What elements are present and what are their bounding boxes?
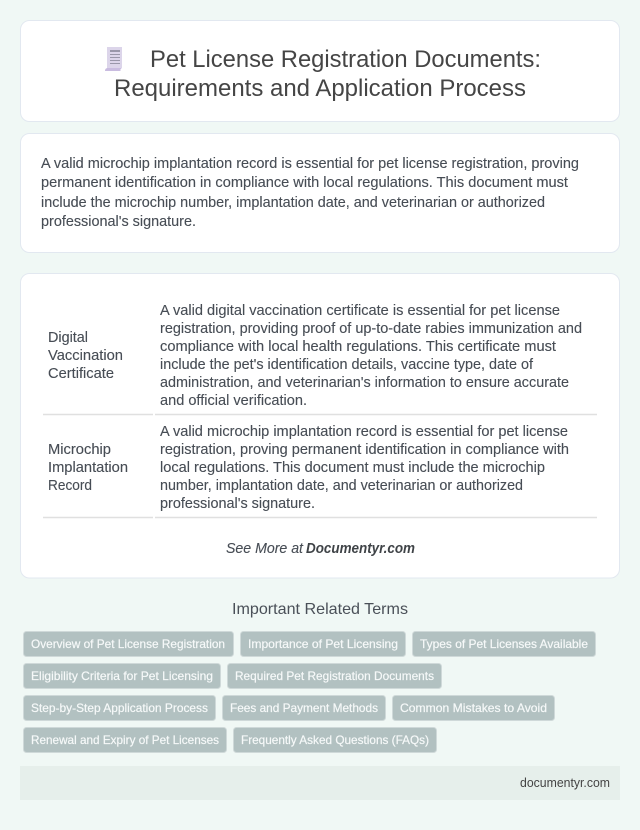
tag	[234, 728, 436, 752]
tag: Types of Pet Licenses Available	[420, 637, 588, 651]
row description: A valid digital vaccination certificate is essential for pet license	[160, 303, 560, 319]
row description: include the pet's identification details, vaccine type, date of	[160, 357, 534, 373]
see more link	[226, 541, 415, 557]
row label: Microchip	[48, 442, 111, 458]
tag	[240, 632, 406, 656]
row label: Record	[48, 478, 92, 494]
row label	[48, 442, 128, 494]
row description: and official verification.	[160, 393, 307, 409]
title: Requirements and Application Process	[114, 75, 526, 102]
tag: Overview of Pet License Registration	[31, 637, 225, 651]
row description: compliance with local health regulations. This certificate must	[160, 339, 556, 355]
tag: Required Pet Registration Documents	[235, 669, 434, 683]
table row: digital vaccination certificate	[48, 303, 582, 409]
intro text: permanent identification in compliance with local regulations. This document must	[41, 175, 568, 191]
tag	[412, 632, 596, 656]
row description: A valid microchip implantation record is essential for pet license	[160, 424, 568, 440]
row description: number, implantation date, and veterinarian or authorized	[160, 478, 523, 494]
tag	[24, 632, 234, 656]
footer	[20, 766, 620, 800]
tag: Renewal and Expiry of Pet Licenses	[31, 733, 219, 747]
row description: professional's signature.	[160, 496, 315, 512]
tag: Importance of Pet Licensing	[248, 637, 398, 651]
table row: microchip implantation record	[48, 424, 569, 512]
row label: Certificate	[48, 366, 114, 382]
row description: registration, providing proof of up-to-date rabies immunization and	[160, 321, 582, 337]
row description: local regulations. This document must include the microchip	[160, 460, 545, 476]
intro text: professional's signature.	[41, 214, 196, 230]
tag	[24, 664, 220, 688]
see more link: See More at	[226, 541, 304, 557]
tag: Step-by-Step Application Process	[31, 701, 208, 715]
tag: Frequently Asked Questions (FAQs)	[241, 733, 429, 747]
row label: Vaccination	[48, 348, 123, 364]
tag	[24, 696, 216, 720]
panel: document table	[20, 274, 620, 578]
panel: title card	[20, 20, 620, 122]
intro text: include the microchip number, implantation date, and veterinarian or authorized	[41, 195, 545, 211]
title: Pet License Registration Documents:	[150, 46, 541, 73]
see more link: Documentyr.com	[306, 541, 415, 557]
footer: documentyr.com	[520, 776, 610, 790]
heading: important related terms: Important Related Terms	[232, 601, 408, 618]
intro text	[41, 156, 579, 230]
row description	[160, 424, 569, 512]
intro text: A valid microchip implantation record is essential for pet license registration, proving	[41, 156, 579, 172]
row label: Implantation	[48, 460, 128, 476]
tag	[24, 728, 226, 752]
tag	[222, 696, 386, 720]
row description: registration, proving permanent identification in compliance with	[160, 442, 569, 458]
tag: Fees and Payment Methods	[230, 701, 378, 715]
tag	[228, 664, 442, 688]
row label	[48, 330, 123, 382]
row description	[160, 303, 582, 409]
icon: document	[105, 47, 122, 71]
row description: administration, and veterinarian's information to ensure accurate	[160, 375, 569, 391]
title	[114, 46, 541, 102]
tag: Eligibility Criteria for Pet Licensing	[31, 669, 213, 683]
tag	[392, 696, 554, 720]
row label: Digital	[48, 330, 88, 346]
related terms tags	[24, 632, 596, 752]
tag: Common Mistakes to Avoid	[400, 701, 547, 715]
panel: introduction	[20, 134, 620, 252]
